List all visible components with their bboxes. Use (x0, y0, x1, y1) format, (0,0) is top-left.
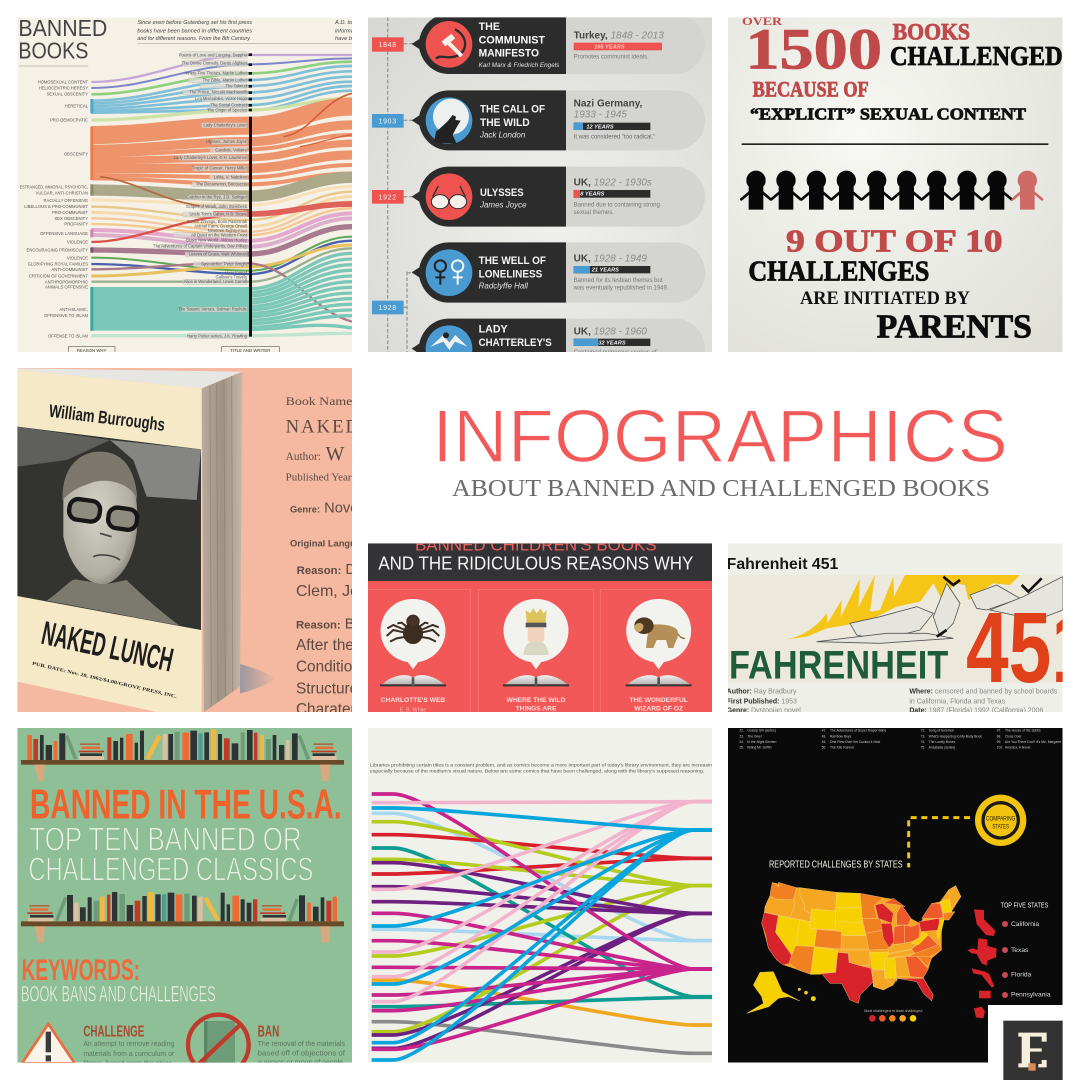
top book list: 22. (739, 729, 744, 733)
reason labels: GLORIFYING ROYAL FAMILIES (28, 262, 88, 267)
dashed connector (909, 818, 970, 867)
book cover (17, 370, 202, 712)
header bar (368, 543, 712, 581)
intro text: have be (335, 36, 355, 42)
title and writer labels: Lady Chatterley's Lover, D.H. Lawrence (174, 155, 248, 160)
row: the communist manifesto: Karl Marx & Friedrich Engels (479, 62, 560, 69)
top book list: 97. (997, 729, 1001, 733)
row: the communist manifesto (412, 14, 705, 74)
row: the communist manifesto: Promotes communist ideals. (574, 55, 649, 61)
sankey flows (91, 55, 352, 336)
statistic: over 1500 books challenged (742, 14, 1063, 123)
top book list: 99. (997, 740, 1001, 744)
top book list: 98. (997, 734, 1001, 738)
row: lady chatterley's lover: UK, 1928 - 1960 (574, 326, 647, 337)
row: the well of loneliness: LONELINESS (479, 268, 542, 280)
top book list: 50. (822, 746, 826, 750)
row: ulysses (412, 167, 705, 227)
top book list: 23. (739, 734, 744, 738)
top five states list: California (1011, 921, 1039, 928)
icon: open book (626, 675, 692, 687)
timeline dashes (388, 17, 413, 352)
book details: Where: censored and banned by school boards (909, 688, 1058, 695)
card: charlotte's web: CHARLOTTE'S WEB (381, 697, 445, 704)
keyword: ban (258, 1024, 346, 1067)
heading: keywords (21, 954, 216, 1007)
axis captions: TITLE AND WRITER (230, 348, 270, 353)
reason labels: RACIALLY OFFENSIVE (44, 198, 88, 203)
row: ulysses: 8 YEARS (580, 192, 605, 198)
icon: spider (387, 616, 439, 643)
reason labels: OFFENSIVE LANGUAGE (40, 231, 88, 236)
row: the call of the wild: THE CALL OF (480, 104, 545, 116)
book details text: Original Language (290, 539, 372, 549)
row: ulysses: ULYSSES (480, 187, 524, 199)
card: charlotte's web (380, 599, 446, 713)
book details: Date: 1987 (Florida) 1992 (California) 2006 (909, 708, 1043, 715)
top book list: Gossip Girl (series) (747, 729, 776, 733)
top book list: 47. (822, 729, 826, 733)
statistic: 9 out of 10 challenges (749, 230, 1031, 338)
statistic: over 1500 books challenged: CHALLENGED (890, 41, 1063, 71)
title axis (249, 53, 252, 337)
top five states list (967, 909, 1051, 1018)
header bar: BANNED CHILDREN'S BOOKS (415, 536, 657, 555)
row: the well of loneliness: THE WELL OF (479, 255, 546, 267)
book details text: Published Year (286, 472, 352, 484)
title and writer labels: The Bible, Martin Luther (203, 77, 248, 82)
row: the well of loneliness: 21 YEARS (591, 268, 619, 274)
top book list: Anastasia (series) (929, 746, 955, 750)
book details text: Charaters (296, 701, 364, 718)
horn-rimmed glasses (68, 498, 138, 531)
top book list: 74. (921, 740, 925, 744)
reason labels: SEX OBSCENITY (54, 216, 88, 221)
title and writer labels: Lolita, V. Nabokov (214, 175, 248, 180)
title and writer labels (153, 52, 248, 338)
year tags: 1922 (379, 194, 397, 201)
statistic: over 1500 books challenged: 1500 (745, 16, 882, 81)
keyword: ban: BAN (258, 1024, 279, 1041)
reason labels: PRO-COMMUNIST (52, 210, 88, 215)
bump chart lines (372, 794, 712, 1060)
reason labels: SEXUAL OBSCENITY (47, 92, 88, 97)
card: charlotte's web: E. B. White (400, 707, 426, 713)
title and writer labels: Nineteen Eighty-Four (208, 228, 248, 233)
title and writer labels: Tropic of Cancer, Henry Miller (192, 166, 248, 171)
icon: warning triangle (22, 1024, 75, 1063)
year tags: 1903 (379, 118, 397, 125)
reason labels: VULGAR, ANTI-CHRISTIAN (36, 191, 88, 196)
title and writer labels: Grapes of Wrath, John Steinbeck (186, 204, 248, 209)
title and writer labels: Ulysses, James Joyce (206, 139, 248, 144)
title and writer labels: Alice in Wonderland, Lewis Carroll (184, 279, 247, 284)
teal obscured block (91, 287, 250, 331)
icon: bird (431, 332, 467, 350)
row: the communist manifesto: COMMUNIST (479, 34, 545, 46)
intro text (137, 20, 356, 44)
comparing states badge: STATES (992, 824, 1009, 831)
reason labels: ANTI-ISLAMIC, (59, 307, 88, 312)
heading: keywords: BOOK BANS AND CHALLENGES (21, 982, 216, 1007)
burning books sketch (817, 577, 1063, 643)
statistic: over 1500 books challenged: BECAUSE OF (753, 77, 869, 102)
intro text: A.D. to (334, 20, 352, 26)
title and writer labels: The Adventures of Captain Underpants, Dav Pilkey (153, 243, 248, 248)
card: where the wild things are: THINGS ARE (516, 705, 557, 712)
book pages (202, 372, 242, 712)
top book list: 72. (921, 729, 925, 733)
top book list: In the Night Kitchen (747, 740, 777, 744)
row: the communist manifesto: MANIFESTO (479, 48, 539, 60)
statistic: over 1500 books challenged: OVER (742, 14, 782, 28)
icon: gender symbols (435, 260, 463, 285)
left axis bars (90, 99, 93, 331)
keyword: ban: based off of objections of (258, 1049, 346, 1058)
panel: banned in the usa (17, 728, 352, 1075)
keyword: challenge: materials from a curriculum or (83, 1049, 175, 1058)
top five states list: Florida (1011, 972, 1032, 979)
top book list: 75. (921, 746, 925, 750)
card: where the wild things are (503, 599, 569, 712)
statistic: 9 out of 10 challenges: PARENTS (877, 308, 1032, 345)
book details text: Book Name (286, 394, 352, 408)
row: the well of loneliness: was eventually republished in 1949. (573, 285, 669, 291)
heading: banned in the usa: BANNED IN THE U.S.A. (30, 780, 342, 827)
keyword: ban: The removal of the materials (258, 1039, 345, 1048)
reason labels: VIOLENCE (67, 240, 88, 245)
book top (17, 368, 242, 388)
heading: keywords: KEYWORDS: (22, 954, 140, 987)
title and writer labels: Lady Chatterley's Lover (203, 122, 248, 127)
reason labels: ESTRANGED, IMMORAL, PSYCHOTIC, (20, 185, 88, 190)
panel: banned book timeline (368, 14, 712, 379)
book details: Genre: Dystopian novel (727, 708, 801, 715)
reason labels: OBSCENITY (64, 151, 88, 156)
heading: banned books: BANNED (18, 15, 107, 41)
cover text: William Burroughs (48, 401, 166, 435)
top five states list: Pennsylvania (1011, 992, 1051, 999)
reason labels: ANIMALS OFFENSIVE (45, 285, 88, 290)
small title: Fahrenheit 451 (727, 556, 839, 573)
reason labels: HERETICAL (65, 104, 89, 109)
map legend: Most challenged to least challenged (864, 1009, 922, 1013)
row: lady chatterley's lover: 32 YEARS (598, 340, 626, 346)
book details text: Structure, (296, 680, 362, 697)
top book list: 48. (822, 734, 826, 738)
logo badge (1003, 1021, 1063, 1080)
title and writer labels: Gulliver's Travels (215, 275, 247, 280)
title and writer labels: All Quiet on the Western Front (191, 233, 248, 238)
top book list: The House of the Spirits (1005, 729, 1041, 733)
title and writer labels: The Satanic Verses, Salman Rushdie (178, 307, 248, 312)
subtitle: ABOUT BANNED AND CHALLENGED BOOKS (452, 476, 990, 502)
pictogram: 9 of 10 people (741, 172, 1042, 208)
reason labels: OFFENSIVE TO ISLAM (44, 313, 89, 318)
title and writer labels: Poems of Love and Longing, Sappho (179, 52, 248, 57)
keyword: challenge: library, based upon the objec- (83, 1058, 175, 1067)
cover photo (17, 427, 201, 630)
title and writer labels: Catcher in the Rye, J.D. Salinger (186, 195, 248, 200)
year tags (372, 37, 404, 314)
top book list: The Adventures of Super Diaper Baby (830, 729, 886, 733)
comparing states badge (975, 795, 1026, 846)
title and writer labels: The Divine Comedy, Dante Alighieri (182, 61, 247, 66)
top book list: Rainbow Boys (830, 734, 852, 738)
row: the call of the wild: Jack London (479, 130, 526, 139)
intro text: books have been banned in different countries (137, 28, 252, 34)
row: the well of loneliness: Radclyffe Hall (479, 282, 528, 291)
title and writer labels: The Decameron, Boccaccio (196, 182, 248, 187)
card: wonderful wizard of oz (626, 599, 692, 712)
reason labels: PROFANITY (64, 222, 88, 227)
top book list: 73. (921, 734, 925, 738)
row: the communist manifesto: THE (479, 21, 500, 33)
row: the well of loneliness (412, 242, 705, 303)
top book list: The Kite Runner (830, 746, 855, 750)
top book list: 49. (822, 740, 826, 744)
top book list: Song of Solomon (929, 729, 954, 733)
year tags: 1928 (379, 305, 397, 312)
row: the call of the wild: It was considered "too radical." (574, 135, 655, 141)
icon: hammer and sickle (436, 29, 465, 59)
row: the call of the wild: 12 YEARS (586, 124, 614, 130)
panel: reported challenges by states (728, 728, 1063, 1063)
book details: First Published: 1953 (727, 698, 797, 705)
row: lady chatterley's lover (412, 318, 705, 352)
book details text: Condition (296, 659, 361, 676)
title and writer labels: The Prince, Niccolò Machiavelli (189, 90, 247, 95)
cover text (32, 401, 177, 700)
panel: naked lunch book (17, 368, 372, 718)
title and writer labels: Doctor Zhivago, Boris Pasternak (187, 219, 248, 224)
book details text: Genre: Novel (290, 501, 362, 517)
title and writer labels: Les Misérables, Victor Hugo (195, 96, 248, 101)
row: lady chatterley's lover: LADY (479, 324, 508, 336)
icon: banned book (188, 1015, 249, 1075)
row: lady chatterley's lover: CHATTERLEY'S (479, 337, 552, 349)
title label backgrounds (158, 52, 247, 339)
intro text: and for different reasons. From the 8th Century (137, 36, 251, 42)
reason labels: CRITICISM OF GOVERNMENT (29, 274, 88, 279)
title and writer labels: Uncle Tom's Cabin, H.B. Stowe (189, 212, 248, 217)
title and writer labels: The Talmud (225, 83, 248, 88)
title and writer labels: Harry Potter series, J.K. Rowling (187, 333, 248, 338)
book details: in California, Florida and Texas (909, 698, 1006, 705)
reason labels: OFFENSE TO ISLAM (48, 333, 89, 338)
row: the well of loneliness: Banned for its lesbian themes but (574, 278, 663, 284)
statistic: 9 out of 10 challenges: 9 OUT OF 10 (786, 223, 1003, 259)
cover text: PUB. DATE: Nov. 20, 1962/$4.00/GROVE PRESS, INC. (32, 662, 177, 700)
heading: banned books: BOOKS (18, 37, 88, 63)
reason labels: HOMOSEXUAL CONTENT (38, 80, 88, 85)
title and writer labels: Mein Kampf (225, 271, 248, 276)
top book list: 25. (739, 746, 744, 750)
book details: Author: Ray Bradbury (727, 688, 797, 695)
panel: banned children's books (368, 543, 712, 712)
keyword: ban: a person or group of people (258, 1058, 343, 1067)
row: the well of loneliness: UK, 1928 - 1949 (574, 254, 647, 265)
keyword: challenge: An attempt to remove reading (83, 1039, 174, 1048)
book details text: Clem, Jos (296, 583, 367, 600)
row: the communist manifesto: 165 YEARS (594, 44, 625, 50)
row: lady chatterley's lover: LOVER (479, 350, 516, 362)
icon: open book (380, 675, 446, 687)
card: wonderful wizard of oz: THE WONDERFUL (629, 697, 688, 704)
title and writer labels: Animal Farm, George Orwell (194, 223, 247, 228)
top book list: Killing Mr. Griffin (747, 746, 772, 750)
top book list: 100. (997, 746, 1003, 750)
top bookshelf (21, 729, 344, 781)
reason labels: LIBELLOUS & PRO-COMMUNIST (24, 204, 88, 209)
top five states heading: TOP FIVE STATES (1001, 901, 1048, 910)
illustration background (728, 575, 1063, 683)
intro text (370, 763, 715, 775)
card: wonderful wizard of oz: WIZARD OF OZ (634, 705, 683, 712)
row: lady chatterley's lover: Contained numerous scenes of (574, 350, 657, 356)
panel: challenged comics line chart (368, 728, 715, 1063)
lower bookshelf (21, 892, 344, 943)
big title: FAHRENHEIT (729, 643, 948, 687)
reason labels (20, 80, 89, 338)
reason labels: PRO-DEMOCRATIC (50, 118, 88, 123)
intro text: informa- (335, 28, 356, 34)
top book list (739, 729, 1061, 750)
reason labels: ENCOURAGING PROMISCUITY (27, 248, 88, 253)
card outlines (363, 589, 716, 723)
intro text: Since even before Gutenberg set his first press (137, 20, 252, 26)
top book list: 24. (739, 740, 744, 744)
icon: max with crown (523, 608, 549, 655)
book details text: After the (296, 637, 354, 654)
comparing states badge: COMPARING (986, 815, 1015, 822)
top book list: Are You There God? It's Me, Margaret (1005, 740, 1061, 744)
top book list: The Giver (747, 734, 763, 738)
title and writer labels: Brave New World, Aldous Huxley (186, 237, 248, 242)
top book list: The Lovely Bones (929, 740, 956, 744)
row: ulysses: Banned due to containing strong (574, 203, 660, 209)
statistic: over 1500 books challenged: BOOKS (893, 19, 970, 45)
title and writer labels: Leaves of Grass, Walt Whitman (189, 251, 248, 256)
title and writer labels: Spycatcher, Peter Wright (201, 261, 248, 266)
heading: banned books (19, 20, 106, 66)
panel: 1500 books challenged (728, 14, 1063, 352)
axis captions: REASON WHY (77, 348, 107, 353)
icon: glasses (431, 186, 467, 209)
row: the communist manifesto: Turkey, 1848 - 2013 (574, 30, 664, 41)
statistic: over 1500 books challenged: “EXPLICIT” SEXUAL CONTENT (750, 104, 1026, 123)
row: ulysses: James Joyce (479, 200, 527, 209)
reason labels: ANTHROPOMORPHIC (45, 279, 88, 284)
top book list: America: A Novel (1005, 746, 1031, 750)
subheading: top ten classics: CHALLENGED CLASSICS (28, 852, 313, 889)
top book list: One Flew Over the Cuckoo's Nest (830, 740, 880, 744)
book details (727, 688, 1058, 715)
row: the call of the wild: THE WILD (480, 117, 530, 129)
map heading: REPORTED CHALLENGES BY STATES (769, 860, 903, 871)
panel: fahrenheit 451 (727, 543, 1080, 715)
card: where the wild things are: WHERE THE WILD (507, 697, 566, 704)
panel: banned books sankey chart (17, 15, 356, 357)
reason labels: ANTI-COMMUNIST (52, 267, 88, 272)
subheading: top ten classics (28, 822, 313, 889)
statistic: 9 out of 10 challenges: CHALLENGES (748, 257, 929, 288)
flames illustration (783, 575, 1020, 640)
map legend (864, 1009, 922, 1022)
top five states list: Texas (1011, 947, 1029, 954)
axis captions (68, 346, 280, 352)
intro text: Libraries prohibiting certain titles is a constant problem, and as comics become a more important part of today's library environment, they are increasing (370, 763, 715, 769)
row: the call of the wild: Nazi Germany, (574, 99, 643, 110)
title and writer labels: Ninety-Five Theses, Martin Luther (184, 71, 248, 76)
row: the call of the wild (412, 90, 705, 150)
title and writer labels: The Social Contract (210, 102, 248, 107)
statistic: 9 out of 10 challenges: ARE INITIATED BY (800, 288, 971, 309)
book shadow (240, 664, 277, 693)
book details text: Author: W (286, 443, 345, 465)
reason labels: HELIOCENTRIC HERESY (39, 86, 88, 91)
book details text: Reason: D (297, 562, 356, 578)
row: ulysses: UK, 1922 - 1930s (574, 178, 652, 189)
top book list: What's Happening to My Body Book (929, 734, 982, 738)
row: the call of the wild: 1933 - 1945 (574, 110, 627, 121)
row: ulysses: sexual themes. (574, 210, 614, 216)
book details text: Reason: B (296, 617, 355, 633)
subheading: top ten classics: TOP TEN BANNED OR (29, 822, 302, 859)
us states map (747, 882, 961, 1013)
keyword: challenge (83, 1024, 175, 1067)
heading: infographics: INFOGRAPHICS (432, 394, 1008, 478)
top book list: Close Over (1005, 734, 1023, 738)
title and writer labels: The Origin of Species (207, 107, 247, 112)
book details text (286, 397, 352, 712)
header bar: AND THE RIDICULOUS REASONS WHY (378, 552, 694, 573)
reason labels: VIOLENCE (67, 256, 88, 261)
intro text: especially because of the medium's visual nature. Below are some comics that have been challenged, along with the library's supposed reasoning. (370, 769, 704, 775)
icon: howling wolf (433, 99, 469, 144)
year tags: 1848 (379, 42, 397, 49)
book details text: NAKED (286, 417, 361, 438)
icon: open book (503, 675, 569, 687)
keyword: challenge: CHALLENGE (83, 1024, 145, 1041)
icon: lion (634, 617, 685, 648)
title and writer labels: Candide, Voltaire (215, 147, 248, 152)
cover text: NAKED LUNCH (38, 615, 176, 680)
